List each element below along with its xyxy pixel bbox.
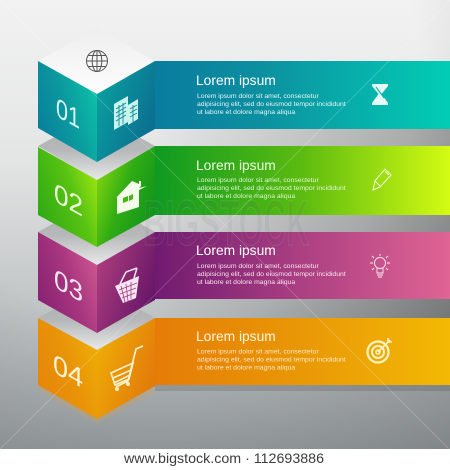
band 04	[155, 318, 450, 385]
icon: hourglass	[372, 84, 388, 105]
icon: globe	[86, 50, 108, 72]
cube left face 04	[38, 318, 97, 419]
footer text: www.bigstock.com · 112693886	[123, 450, 324, 466]
icon: pencil	[373, 169, 391, 190]
description 04: adipisicing elit, sed do eiusmod tempor incididunt	[197, 356, 346, 364]
panel: step 04	[38, 285, 450, 419]
cube 04 shadow	[38, 385, 155, 424]
icon: house	[115, 181, 147, 214]
icon: light bulb	[370, 254, 390, 277]
panel: step 02	[38, 114, 450, 247]
description 04: Lorem ipsum dolor sit amet, consectetur	[197, 348, 319, 356]
number 04: 04	[53, 349, 83, 395]
description 01: Lorem ipsum dolor sit amet, consectetur	[197, 93, 319, 100]
description 02: Lorem ipsum dolor sit amet, consectetur	[197, 177, 319, 184]
heading 03: Lorem ipsum	[196, 243, 276, 258]
number 02: 02	[54, 178, 83, 224]
heading 02: Lorem ipsum	[196, 158, 276, 173]
cube right face 01	[97, 61, 155, 162]
cube top face 03	[38, 199, 155, 265]
cube right face 04	[97, 318, 155, 419]
cube right face 02	[97, 146, 155, 247]
panel: step 01	[38, 28, 450, 162]
description 01: adipisicing elit, sed do eiusmod tempor incididunt	[197, 101, 346, 108]
cube right face 03	[97, 232, 155, 333]
cube left face 03	[38, 232, 97, 333]
number 03: 03	[54, 264, 83, 310]
footer credit	[0, 449, 450, 470]
icon: target	[368, 338, 392, 362]
description 03: Lorem ipsum dolor sit amet, consectetur	[197, 263, 319, 270]
description 02: ut labore et dolore magna aliqua	[197, 193, 295, 200]
icon: shopping cart	[111, 346, 143, 390]
icon: basket	[115, 268, 139, 303]
band 03	[155, 232, 450, 299]
description 04: ut labore et dolore magna aliqua	[197, 364, 295, 372]
heading 01: Lorem ipsum	[196, 73, 276, 88]
cube left face 02	[38, 147, 97, 247]
heading 04: Lorem ipsum	[196, 329, 276, 344]
description 02: adipisicing elit, sed do eiusmod tempor incididunt	[197, 185, 346, 192]
cube top face 02	[38, 114, 155, 180]
number 01: 01	[56, 93, 80, 136]
band 01	[155, 61, 450, 129]
cube top face 04	[38, 285, 155, 350]
description 01: ut labore et dolore magna aliqua	[197, 109, 295, 116]
cube top face 01	[38, 28, 155, 94]
gaps between bands	[155, 129, 450, 391]
description 03: adipisicing elit, sed do eiusmod tempor incididunt	[197, 271, 346, 278]
panel: step 03	[38, 199, 450, 333]
description 03: ut labore et dolore magna aliqua	[197, 279, 295, 286]
cube left face 01	[38, 61, 97, 162]
band 02	[155, 146, 450, 215]
icon: buildings	[114, 96, 138, 130]
